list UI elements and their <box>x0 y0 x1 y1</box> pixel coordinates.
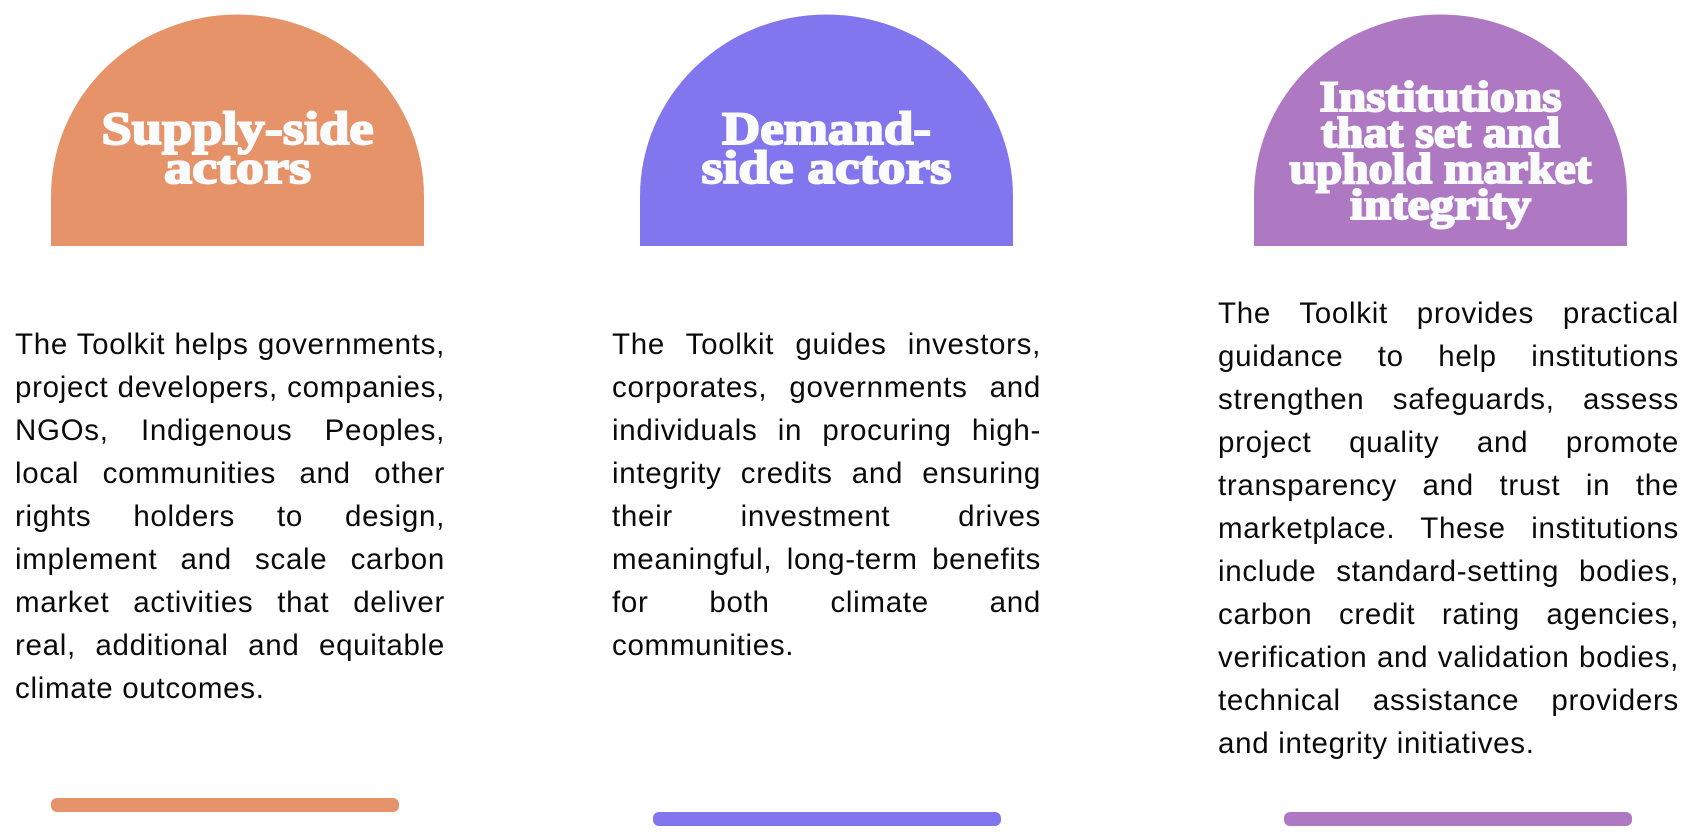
text block: demand-side description: individuals in procuring high- <box>612 414 1041 447</box>
text block: institutions description: carbon credit rating agencies, <box>1218 598 1679 631</box>
heading: Institutions that set and uphold market integrity: Institutions <box>1320 74 1562 121</box>
text block: supply-side description: rights holders to design, <box>15 500 445 533</box>
text block: demand-side description: integrity credits and ensuring <box>612 457 1041 490</box>
text block: supply-side description: implement and scale carbon <box>15 543 445 576</box>
heading: Institutions that set and uphold market integrity: integrity <box>1350 182 1532 229</box>
text block: demand-side description: for both climate and <box>612 586 1041 619</box>
text block: demand-side description: their investment drives <box>612 500 1041 533</box>
heading: Supply-side actors <box>102 103 374 194</box>
heading: Demand-side actors: Demand- <box>722 103 931 155</box>
text block: institutions description: project quality and promote <box>1218 426 1679 459</box>
heading: Supply-side actors: Supply-side <box>102 103 374 155</box>
text block: supply-side description: NGOs, Indigenous Peoples, <box>15 414 445 447</box>
text block: demand-side description: meaningful, long-term benefits <box>612 543 1041 576</box>
panel: institutions header <box>1254 14 1627 246</box>
panel: supply-side header <box>51 14 424 246</box>
text block: institutions description: marketplace. These institutions <box>1218 512 1679 545</box>
text block: institutions description: technical assistance providers <box>1218 684 1679 717</box>
heading: Supply-side actors: actors <box>164 142 311 194</box>
text block: demand-side description: The Toolkit guides investors, <box>612 328 1041 360</box>
text block: demand-side description: corporates, governments and <box>612 371 1041 404</box>
text block: supply-side description <box>15 328 445 705</box>
text block: institutions description: verification and validation bodies, <box>1218 641 1679 674</box>
text block: institutions description <box>1218 296 1679 760</box>
text block: institutions description: transparency and trust in the <box>1218 469 1679 502</box>
heading: Demand-side actors: side actors <box>702 142 952 194</box>
text block: demand-side description <box>612 328 1041 662</box>
heading: Institutions that set and uphold market integrity: that set and <box>1321 110 1560 157</box>
heading: Demand-side actors <box>702 103 952 194</box>
text block: institutions description: guidance to help institutions <box>1218 340 1679 373</box>
heading: Institutions that set and uphold market integrity: uphold market <box>1290 146 1592 193</box>
bar: demand-side accent <box>653 812 1001 826</box>
bar: supply-side accent <box>51 798 399 812</box>
text block: supply-side description: climate outcomes. <box>15 672 265 705</box>
text block: demand-side description: communities. <box>612 629 794 662</box>
text block: institutions description: The Toolkit provides practical <box>1218 296 1679 330</box>
text block: institutions description: strengthen safeguards, assess <box>1218 383 1679 416</box>
text block: institutions description: include standard-setting bodies, <box>1218 555 1679 588</box>
text block: supply-side description: The Toolkit helps governments, <box>15 328 445 360</box>
text block: institutions description: and integrity initiatives. <box>1218 727 1535 760</box>
text block: supply-side description: market activities that deliver <box>15 586 445 619</box>
text block: supply-side description: project developers, companies, <box>15 371 445 404</box>
text block: supply-side description: real, additional and equitable <box>15 629 445 662</box>
heading: Institutions that set and uphold market integrity <box>1290 74 1592 229</box>
bar: institutions accent <box>1284 812 1632 826</box>
panel: demand-side header <box>640 14 1013 246</box>
text block: supply-side description: local communities and other <box>15 457 445 490</box>
